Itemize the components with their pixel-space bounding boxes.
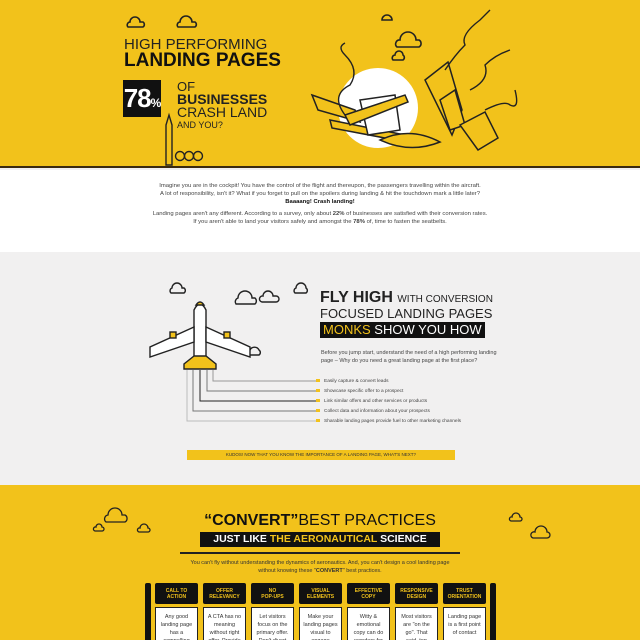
stat text: CRASH LAND (177, 104, 267, 120)
illustration: airplane with lines (149, 282, 320, 422)
card: trust orientation (443, 583, 486, 640)
title (124, 36, 281, 71)
panel: intro text: Landing pages aren't any different. According to a survey, only about 22% of businesses are satisfied with their conversion rates. (153, 211, 487, 217)
stat text: OF (177, 79, 195, 94)
card: visual elements: VISUAL (311, 588, 330, 594)
card: effective copy (347, 583, 390, 640)
panel: fly high (149, 282, 497, 460)
card: visual elements: ELEMENTS (307, 594, 334, 600)
stat text: BUSINESSES (177, 91, 267, 107)
panel: convert best practices (0, 485, 640, 640)
card: call to action (155, 583, 198, 640)
panel: intro text (0, 170, 640, 252)
text block: without knowing these "CONVERT" best practices. (258, 568, 382, 574)
list: benefits: Link similar offers and other services or products (324, 399, 427, 404)
title: LANDING PAGES (124, 50, 281, 71)
list: benefits: Sharable landing pages provide fuel to other marketing channels (324, 419, 461, 424)
stat text (177, 79, 267, 130)
text block (321, 350, 497, 364)
list: benefits: Easily capture & convert leads (324, 379, 389, 384)
card: trust orientation: ORIENTATION (448, 594, 481, 600)
title: HIGH PERFORMING (124, 36, 267, 53)
text block (190, 560, 450, 574)
card: visual elements (299, 583, 342, 640)
panel: intro text: A lot of responsibility, isn't it? What if you forget to pull on the spoilers during landing & hit the touchdown mark a little later? (160, 191, 480, 197)
callout bar (187, 450, 455, 460)
panel: hero (0, 0, 640, 168)
heading: fly high: MONKS SHOW YOU HOW (323, 322, 482, 337)
list: benefits: Showcase specific offer to a prospect (324, 389, 403, 394)
card: no pop-ups: NO (269, 588, 276, 594)
card: effective copy: COPY (361, 594, 376, 600)
cards (155, 583, 486, 640)
text block: page – Why do you need a great landing page at the first place? (321, 358, 477, 364)
heading: convert: “CONVERT”BEST PRACTICES (204, 512, 436, 529)
card: responsive design (395, 583, 438, 640)
heading: fly high (320, 289, 493, 338)
card: responsive design: RESPONSIVE (400, 588, 433, 594)
text block: You can't fly without understanding the dynamics of aeronautics. And, you can't design a cool landing page (190, 560, 450, 566)
card: effective copy: EFFECTIVE (355, 588, 382, 594)
stat 78%: 78% (124, 83, 160, 113)
card: offer relevancy (203, 583, 246, 640)
card: no pop-ups (251, 583, 294, 640)
illustration: crashed plane (126, 10, 518, 166)
card: trust orientation: Landing page is a first point of contact (448, 614, 481, 636)
card: offer relevancy: OFFER (216, 588, 233, 594)
panel: intro text: Imagine you are in the cockpit! You have the control of the flight and thereupon, the passengers travelling within the aircraft. (159, 183, 481, 189)
card: responsive design: DESIGN (407, 594, 426, 600)
card: no pop-ups: POP-UPS (261, 594, 284, 600)
card: offer relevancy: RELEVANCY (209, 594, 240, 600)
card: call to action: ACTION (167, 594, 186, 600)
heading: fly high: FLY HIGH WITH CONVERSION (320, 289, 493, 306)
text block: Before you jump start, understand the need of a high performing landing (321, 350, 497, 356)
list: benefits (324, 378, 461, 424)
callout bar: KUDOS! NOW THAT YOU KNOW THE IMPORTANCE OF A LANDING PAGE, WHAT'S NEXT? (226, 452, 416, 457)
list: benefits: Collect data and information about your prospects (324, 409, 430, 414)
subheading: JUST LIKE THE AERONAUTICAL SCIENCE (213, 533, 427, 545)
panel: intro text: If you aren't able to land your visitors safely and amongst the 78% of, time to fasten the seatbelts. (193, 219, 447, 225)
card: trust orientation: TRUST (456, 588, 473, 594)
icons: clouds (92, 507, 551, 539)
heading: fly high: FOCUSED LANDING PAGES (320, 306, 492, 321)
card: call to action: CALL TO (166, 588, 187, 594)
stat text: AND YOU? (177, 120, 223, 130)
panel: intro text: Baaaang! Crash landing! (285, 199, 355, 205)
